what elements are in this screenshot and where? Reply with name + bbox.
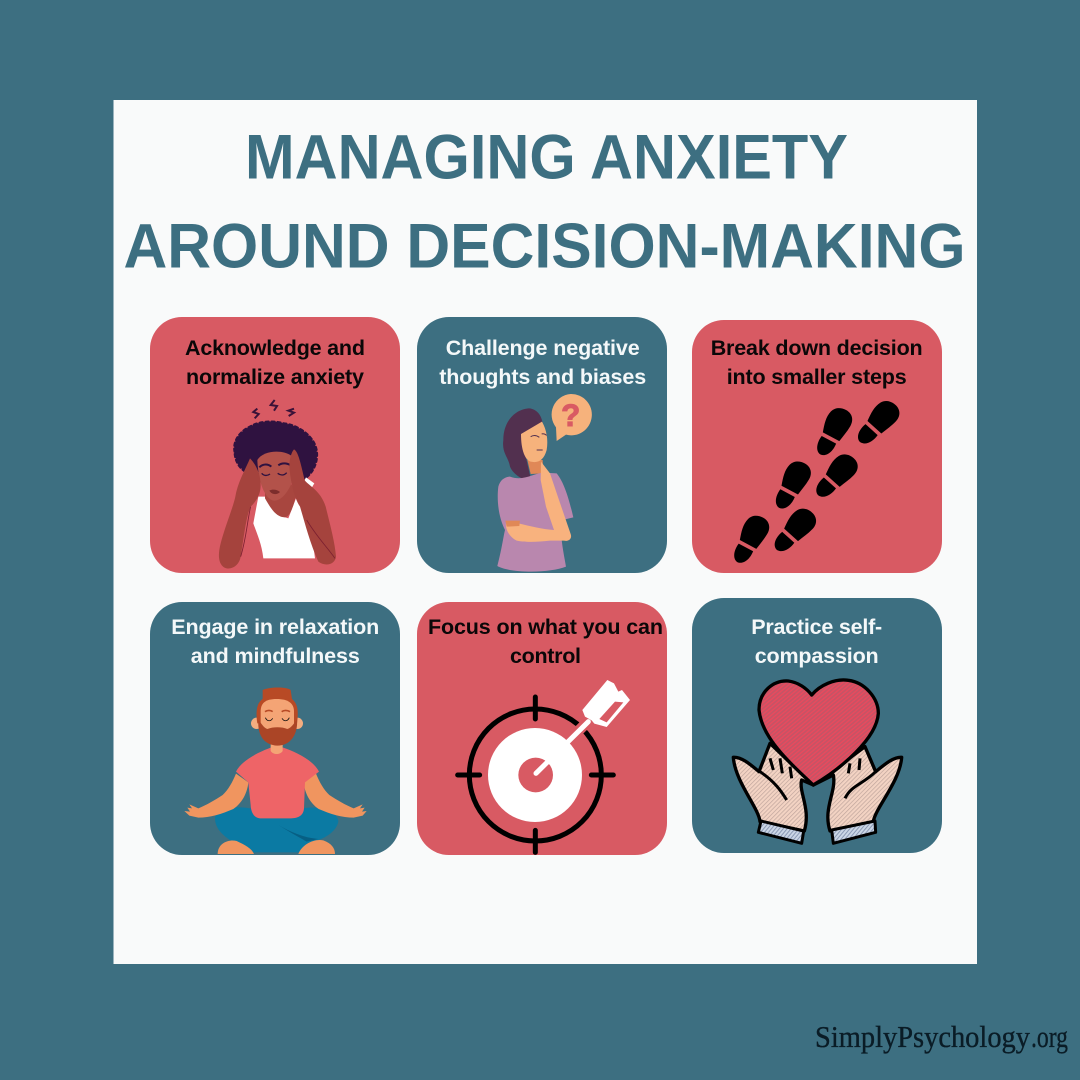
source credit: .org [1031, 1019, 1068, 1054]
source credit: SimplyPsychology [815, 1019, 1030, 1054]
title [124, 122, 966, 282]
heading: challenge: thoughts and biases [439, 365, 646, 389]
heading: engage: Engage in relaxation [171, 615, 379, 639]
heading: acknowledge: Acknowledge and [185, 336, 365, 360]
panel: break down decision [692, 320, 942, 573]
heading: acknowledge: normalize anxiety [186, 365, 364, 389]
title: AROUND DECISION-MAKING [124, 212, 966, 282]
panel: practice self-compassion [692, 598, 942, 853]
heading: challenge: Challenge negative [446, 336, 640, 360]
heading: engage: and mindfulness [191, 644, 360, 668]
heading: focus: control [510, 644, 581, 668]
heading: self-compassion: compassion [755, 644, 879, 668]
heading: self-compassion: Practice self- [751, 615, 882, 639]
panel: relaxation and mindfulness [150, 602, 400, 855]
panel: challenge negative thoughts [417, 317, 667, 573]
icon: meditating man [184, 687, 367, 854]
icon: stressed woman [219, 400, 336, 568]
white content panel [114, 100, 977, 964]
icon: hands holding heart [733, 680, 902, 843]
panel: acknowledge and normalize anxiety [150, 317, 400, 573]
icon: thinking woman with question bubble [497, 394, 592, 572]
icon: target and arrow [458, 680, 630, 852]
title: MANAGING ANXIETY [245, 122, 848, 192]
heading: break down: Break down decision [711, 336, 923, 360]
icon: thinking woman with question bubble: ? [561, 398, 580, 433]
icon: footprints [727, 396, 904, 568]
heading: break down: into smaller steps [727, 365, 907, 389]
panel: focus on what you can control [417, 602, 667, 855]
heading: focus: Focus on what you can [428, 615, 663, 639]
